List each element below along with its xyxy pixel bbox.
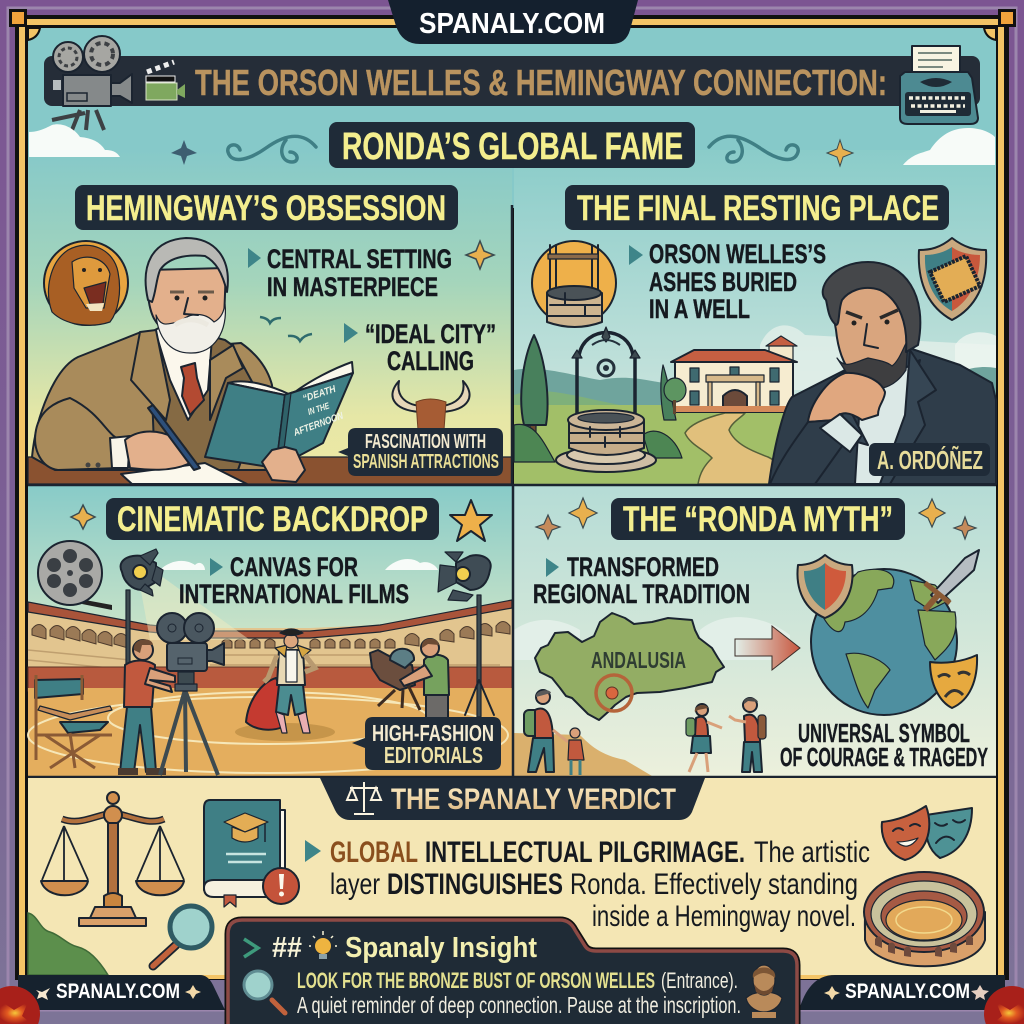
book: Death in the Afternoon: AFTERNOON [291, 410, 345, 439]
globe with shield, sword and mask [797, 550, 979, 715]
hill [514, 733, 652, 776]
figure: Orson Welles [769, 262, 996, 484]
label: A. Ordonez [869, 443, 990, 476]
panel: The Final Resting Place [514, 150, 996, 484]
sparkles [536, 498, 976, 539]
bullet: ideal city: CALLING [387, 346, 474, 376]
ornament: right star [827, 140, 853, 166]
cloud: left [29, 124, 120, 157]
panel: Spanaly verdict [28, 778, 996, 975]
icon: academic book with alert [204, 800, 299, 907]
corner ornaments [9, 9, 1016, 40]
table [28, 457, 512, 484]
panel backdrop: top sky [28, 28, 996, 208]
panel: Spanaly Insight [228, 920, 797, 1024]
top banner: site name [388, 0, 638, 44]
book: Death in the Afternoon [205, 362, 353, 468]
icon: scales of justice [41, 792, 184, 926]
hiker and child [524, 690, 584, 775]
villa [661, 336, 797, 420]
banner: bottom-right brand: SPANALY.COM [845, 980, 970, 1003]
heading: Spanaly Insight [244, 931, 537, 964]
right spotlight [438, 552, 494, 717]
text: verdict body: inside a Hemingway novel. [592, 900, 856, 933]
path [685, 413, 790, 484]
bullet: ashes buried [629, 239, 826, 324]
mask [930, 655, 977, 708]
sword [925, 550, 979, 610]
ornament: left flourish [228, 136, 316, 162]
map: Andalusia [535, 613, 724, 720]
icon: shield with film [919, 238, 986, 320]
text: verdict body: The artistic [754, 836, 870, 869]
bullet: ideal city: “IDEAL CITY” [365, 319, 496, 349]
callout: high-fashion editorials: EDITORIALS [384, 742, 483, 768]
heading: Hemingway's Obsession: HEMINGWAY’S OBSESSION [86, 189, 446, 228]
panel: The Ronda Myth [514, 486, 996, 776]
icon: gold sparkle [466, 241, 494, 269]
text: verdict body: Ronda. Effectively standing [570, 868, 858, 901]
icon: small scales [347, 782, 381, 814]
bullet: ashes buried: ASHES BURIED [649, 267, 797, 297]
bullring [28, 600, 512, 776]
ornament: left star [171, 140, 197, 165]
text: insight body: (Entrance). [661, 968, 738, 993]
cloud: right [903, 128, 995, 165]
ronda heading [329, 122, 695, 168]
bullet: transformed regional tradition: REGIONAL TRADITION [533, 579, 750, 609]
clouds [160, 559, 438, 570]
callout: fascination [338, 428, 503, 476]
icon: bronze bust [746, 965, 782, 1018]
director's chair [35, 675, 112, 768]
bull prop and crew member [370, 639, 449, 718]
ornament: right flourish [709, 136, 798, 162]
banner: the Spanaly verdict [320, 778, 705, 820]
arrow: region to world [735, 626, 800, 670]
text: insight body: A quiet reminder of deep connection. Pause at the inscription. [297, 992, 741, 1018]
well [556, 327, 656, 472]
panel: Cinematic Backdrop [28, 486, 512, 776]
banner: bottom-left brand: SPANALY.COM [56, 980, 180, 1003]
bullet: transformed regional tradition [533, 552, 750, 609]
icon: theatre masks [882, 806, 972, 860]
icon: film projector camera [52, 36, 132, 130]
heading: The Ronda Myth: THE “RONDA MYTH” [623, 500, 893, 539]
banner: bottom-right brand [799, 975, 1005, 1010]
map: Andalusia: ANDALUSIA [591, 647, 686, 673]
bush [28, 913, 108, 975]
burst: bottom-right corner [984, 986, 1024, 1024]
shield [797, 555, 853, 618]
bullet: ashes buried: ORSON WELLES’S [649, 239, 826, 269]
banner: the Spanaly verdict: THE SPANALY VERDICT [391, 783, 676, 816]
panel: Hemingway's Obsession [28, 150, 512, 484]
text: verdict body: INTELLECTUAL PILGRIMAGE. [425, 836, 745, 869]
callout: fascination: FASCINATION WITH [365, 431, 486, 453]
bullet: canvas for international films [179, 552, 409, 609]
callout: high-fashion editorials [352, 717, 501, 770]
ronda heading: RONDA’S GLOBAL FAME [342, 126, 683, 168]
text: verdict body [305, 836, 870, 933]
bullfighter [235, 629, 335, 741]
book: Death in the Afternoon: “DEATH [302, 384, 338, 405]
top banner: site name: SPANALY.COM [419, 8, 605, 40]
bullet: transformed regional tradition: TRANSFORMED [567, 552, 719, 582]
icon: film reel [38, 541, 112, 610]
bullet: central setting: IN MASTERPIECE [267, 272, 438, 302]
burst: bottom-left corner [0, 986, 40, 1024]
callout: fascination: SPANISH ATTRACTIONS [353, 451, 499, 473]
text: verdict body: layer [330, 868, 380, 901]
figure: Hemingway writing and reading [32, 238, 276, 484]
icon: small magnifier [244, 971, 285, 1013]
icon: well circle [532, 241, 616, 327]
icon: birds [260, 317, 312, 341]
hand holding book [262, 447, 305, 482]
bullet: central setting: CENTRAL SETTING [267, 244, 452, 274]
heading: Hemingway's Obsession [75, 185, 458, 230]
pale clouds [514, 617, 790, 660]
icon: typewriter [900, 46, 978, 124]
banner: bottom-left brand [18, 975, 225, 1010]
bullet: canvas for international films: CANVAS FOR [230, 552, 358, 582]
bullet: canvas for international films: INTERNATIONAL FILMS [179, 579, 409, 609]
heading: Spanaly Insight: ## [272, 932, 302, 964]
icon: bullring [863, 872, 985, 966]
icon: star [450, 500, 492, 541]
book: Death in the Afternoon: IN THE [307, 400, 331, 417]
icon: lion [44, 241, 128, 325]
icon: bull head [392, 381, 470, 430]
heading: Cinematic Backdrop: CINEMATIC BACKDROP [117, 500, 428, 539]
title bar [44, 56, 980, 106]
icon: gold sparkle [71, 505, 95, 529]
clouds and hills [514, 325, 996, 484]
bullet: ashes buried: IN A WELL [649, 294, 750, 324]
bullet: central setting [248, 244, 452, 302]
text: verdict body: DISTINGUISHES [387, 868, 563, 901]
text: insight body: LOOK FOR THE BRONZE BUST OF ORSON WELLES [297, 968, 655, 993]
text: universal symbol [780, 718, 988, 772]
left spotlight [121, 549, 250, 675]
camera operator [118, 639, 175, 775]
cypress tree [514, 335, 682, 462]
icon: magnifying glass [153, 906, 212, 966]
film camera on tripod [157, 613, 224, 775]
heading: Spanaly Insight: Spanaly Insight [345, 932, 537, 964]
couple of travellers [686, 698, 766, 772]
paper [121, 463, 247, 484]
bullet: ideal city [344, 319, 496, 376]
callout: high-fashion editorials: HIGH-FASHION [372, 720, 494, 746]
text: insight body [297, 968, 741, 1018]
panel dividers [28, 205, 996, 777]
icon: clapper camera [146, 62, 185, 100]
text: verdict body: GLOBAL [330, 836, 418, 869]
